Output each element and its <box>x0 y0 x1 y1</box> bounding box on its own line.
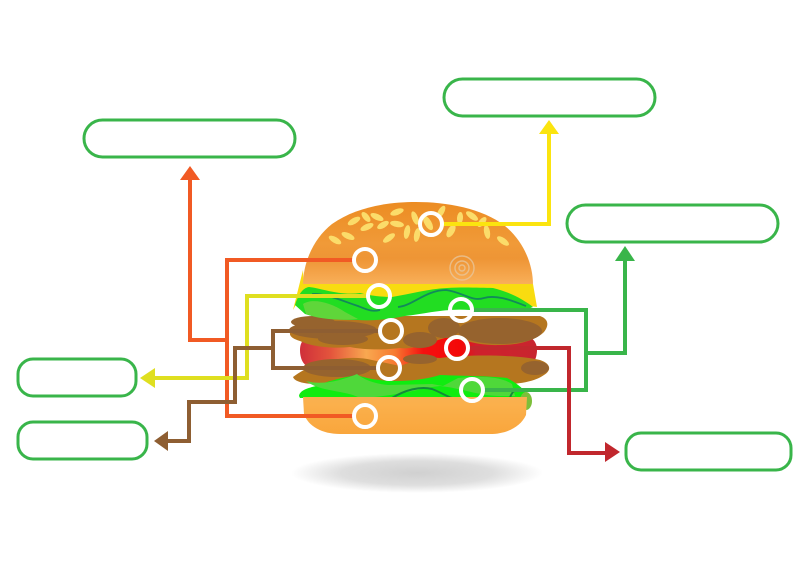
upper patty <box>289 316 547 349</box>
cheese sliver left <box>293 270 304 310</box>
lettuce veins <box>312 290 526 311</box>
sesame seeds <box>327 204 510 247</box>
connector: patties to lower-left callout (brown) <box>154 331 380 451</box>
arrow left: brown <box>154 431 168 451</box>
lettuce vein <box>392 388 524 398</box>
arrow left: yellow-green <box>140 368 155 388</box>
arrow up: yellow <box>539 120 559 134</box>
connector: bun top and bottom to upper-left callout (orange) <box>180 166 354 416</box>
watermark spiral <box>450 256 474 280</box>
lower patty <box>293 354 549 385</box>
connector: top bun seeds to top callout (yellow) <box>442 120 559 224</box>
connector: lettuce to right callout (green) <box>472 246 635 390</box>
arrow right: red <box>605 442 620 462</box>
connector: cheese to left callout (yellow-green) <box>140 296 368 388</box>
cheese <box>300 284 537 307</box>
marker rings <box>354 213 483 427</box>
tomato <box>300 335 537 370</box>
bottom bun <box>303 397 527 434</box>
top bun <box>303 202 533 285</box>
lettuce light fold <box>303 301 358 320</box>
top lettuce <box>295 287 533 320</box>
arrow up: orange <box>180 166 200 180</box>
callout box: left <box>18 359 136 396</box>
callout box: top <box>444 79 655 116</box>
hamburger illustration <box>289 202 549 434</box>
ground shadow <box>291 453 543 493</box>
connector: tomato to lower-right callout (red) <box>468 348 620 462</box>
callout box: lower left <box>18 422 147 459</box>
callout box: upper left <box>84 120 295 157</box>
lettuce light fold <box>306 374 515 398</box>
bottom lettuce <box>299 375 528 398</box>
arrow up: green <box>615 246 635 261</box>
callout box: right <box>567 205 778 242</box>
callout box: lower right <box>626 433 791 470</box>
